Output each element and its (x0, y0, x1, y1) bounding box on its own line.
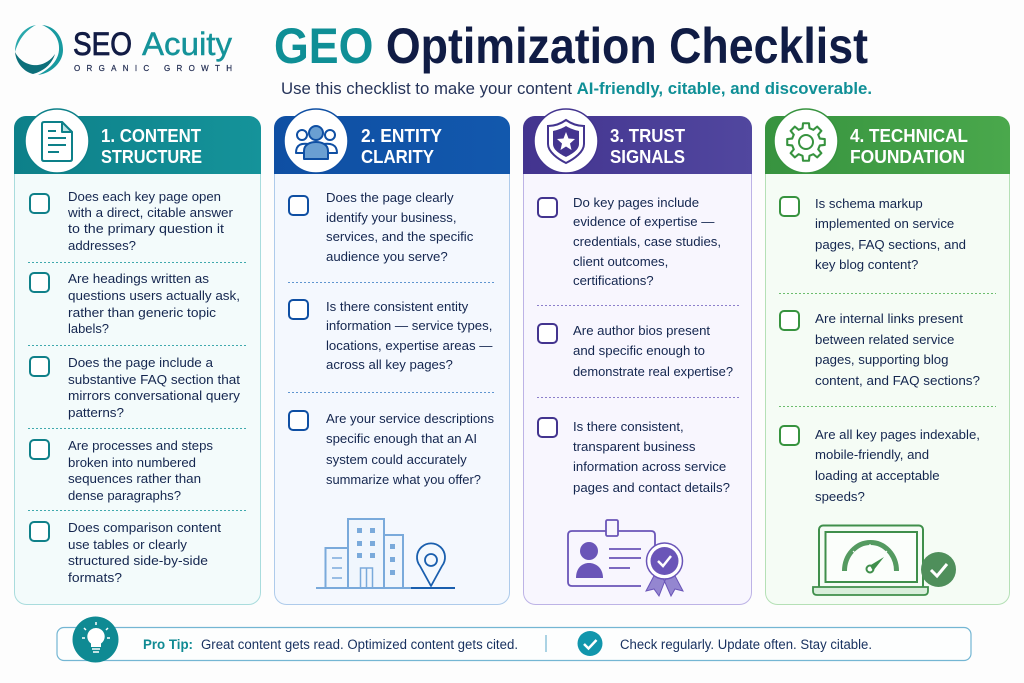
item 4: broken into numbered (68, 455, 196, 470)
item 3 (780, 426, 980, 504)
heading: STRUCTURE (101, 146, 202, 167)
item 1: to the primary question it (68, 221, 224, 236)
item 3: specific enough that an AI (326, 431, 477, 446)
item 1: client outcomes, (573, 254, 668, 269)
item 1: with a direct, citable answer (67, 205, 234, 220)
heading (361, 125, 443, 167)
item 2 (780, 311, 980, 388)
heading: CLARITY (361, 146, 435, 167)
item 3: pages and contact details? (573, 480, 730, 495)
panel: trust signals (523, 109, 752, 604)
item 1: Does each key page open (68, 189, 221, 204)
logo wordmark: SEO (73, 26, 132, 62)
logo: SEO Acuity (15, 25, 232, 75)
icon: logo swirl (15, 25, 63, 75)
panel header (765, 116, 1010, 174)
heading: 2. ENTITY (361, 125, 443, 146)
item 1: implemented on service (815, 216, 954, 231)
item 2 (30, 271, 240, 336)
item 1: credentials, case studies, (573, 234, 721, 249)
item 1: Is schema markup (815, 196, 923, 211)
item 2 (289, 299, 493, 372)
item 3: substantive FAQ section that (68, 372, 240, 387)
item 3: mobile-friendly, and (815, 447, 929, 462)
heading: 4. TECHNICAL (850, 125, 968, 146)
item 2: pages, supporting blog (815, 352, 948, 367)
icon: document (25, 109, 89, 173)
item 1: addresses? (68, 238, 136, 253)
item 3: system could accurately (326, 452, 467, 467)
illustration: buildings and map pin (316, 519, 455, 588)
item 3: Is there consistent, (573, 419, 684, 434)
subtitle: Use this checklist to make your content AI-friendly, citable, and discoverable. (281, 80, 872, 98)
item 3: speeds? (815, 489, 865, 504)
item 5: use tables or clearly (68, 537, 187, 552)
item 2: Is there consistent entity (326, 299, 469, 314)
item 2: Are author bios present (573, 323, 710, 338)
item 1 (30, 189, 234, 253)
panel body (14, 116, 260, 604)
panel: entity clarity (274, 109, 510, 604)
item 5: Does comparison content (68, 520, 221, 535)
pro tip text: Great content gets read. Optimized content gets cited. (201, 637, 518, 652)
item 2: information — service types, (326, 318, 492, 333)
logo: SEO Acuity: Acuity (142, 26, 232, 62)
panel: technical foundation (765, 109, 1010, 604)
item 4: dense paragraphs? (68, 488, 181, 503)
item 1: identify your business, (326, 210, 456, 225)
heading: 3. TRUST (610, 125, 686, 146)
item 2: questions users actually ask, (68, 288, 240, 303)
icon: light bulb (72, 616, 118, 662)
item 3: patterns? (68, 405, 124, 420)
panel body (274, 116, 510, 604)
panel header (523, 116, 752, 174)
item 1: Do key pages include (573, 195, 699, 210)
panel body (524, 116, 752, 604)
heading (101, 125, 202, 167)
item 2: demonstrate real expertise? (573, 364, 733, 379)
bar outline (57, 628, 971, 660)
item 3: loading at acceptable (815, 468, 940, 483)
heading: 1. CONTENT (101, 125, 202, 146)
item 1 (538, 195, 721, 288)
title: GEO Optimization Checklist (274, 18, 868, 74)
item 1: certifications? (573, 273, 654, 288)
callout: pro tip bar (57, 616, 971, 662)
item 2: content, and FAQ sections? (815, 373, 980, 388)
item 1: audience you serve? (326, 249, 448, 264)
pro tip label: Pro Tip: (143, 636, 193, 652)
illustration: laptop with gauge (813, 526, 956, 595)
item 1 (289, 190, 474, 264)
item 2 (538, 323, 733, 379)
icon: check badge (578, 631, 602, 656)
item 1: pages, FAQ sections, and (815, 237, 966, 252)
item 2: Are internal links present (815, 311, 963, 326)
item 2: Are headings written as (68, 271, 209, 286)
illustration: ID badge with ribbon (568, 520, 683, 596)
item 3 (30, 355, 240, 420)
item 2: and specific enough to (573, 343, 705, 358)
icon: gear (774, 109, 838, 173)
panel header (274, 116, 510, 174)
reminder text: Check regularly. Update often. Stay citable. (620, 637, 872, 652)
item 3 (289, 411, 494, 487)
item 5: formats? (68, 570, 122, 585)
item 1: services, and the specific (326, 229, 474, 244)
item 3: summarize what you offer? (326, 472, 481, 487)
item 5: structured side-by-side (68, 553, 208, 568)
item 2: between related service (815, 332, 954, 347)
item 1: Does the page clearly (326, 190, 454, 205)
item 4: sequences rather than (68, 471, 201, 486)
panel: content structure (14, 109, 261, 604)
icon: shield with star (534, 109, 598, 173)
item 3: information across service (573, 459, 726, 474)
item 3: transparent business (573, 439, 696, 454)
heading (850, 125, 968, 167)
item 3: Are your service descriptions (326, 411, 494, 426)
item 2: across all key pages? (326, 357, 453, 372)
item 2: rather than generic topic (68, 305, 216, 320)
item 1: evidence of expertise — (573, 214, 715, 229)
item 3 (538, 418, 730, 495)
item 4 (30, 438, 213, 503)
panel body (766, 116, 1010, 604)
heading (610, 125, 686, 167)
heading: FOUNDATION (850, 146, 965, 167)
logo tagline: ORGANIC GROWTH (74, 64, 232, 73)
item 1 (780, 196, 966, 272)
item 3: Are all key pages indexable, (815, 427, 980, 442)
item 5 (30, 520, 221, 585)
panel header (14, 116, 261, 174)
item 1: key blog content? (815, 257, 918, 272)
item 3: mirrors conversational query (68, 388, 240, 403)
icon: people (284, 109, 348, 173)
item 2: locations, expertise areas — (326, 338, 493, 353)
item 3: Does the page include a (68, 355, 214, 370)
item 2: labels? (68, 321, 109, 336)
heading: SIGNALS (610, 146, 685, 167)
item 4: Are processes and steps (68, 438, 213, 453)
